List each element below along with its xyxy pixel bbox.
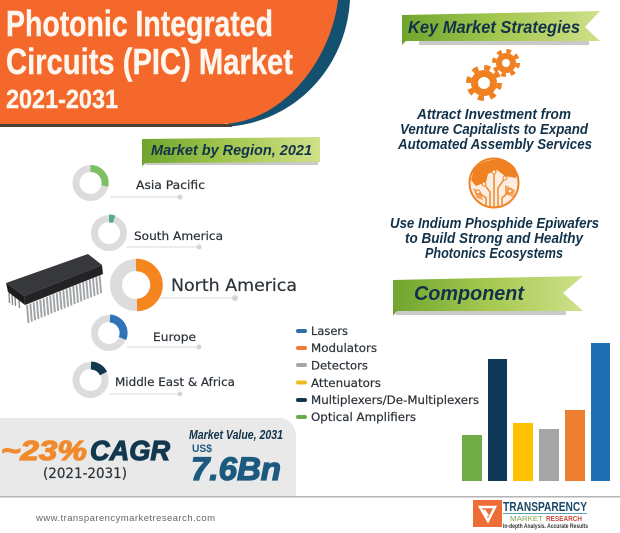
- bar chart: components: [462, 343, 610, 481]
- logo: TRANSPARENCY: [503, 500, 588, 514]
- donut: South America: South America: [134, 229, 223, 243]
- market value figure: US$: [192, 443, 212, 455]
- CAGR figure: [1, 435, 171, 482]
- donut: Middle East and Africa: [76, 366, 235, 396]
- donut: Asia Pacific: [76, 168, 205, 200]
- legend: components: [296, 324, 479, 424]
- title: Circuits (PIC) Market: [6, 41, 293, 82]
- legend: components: Lasers: [311, 324, 348, 338]
- donut: Middle East and Africa: Middle East & Africa: [115, 375, 235, 389]
- donut: Europe: Europe: [153, 330, 196, 344]
- header banner: [0, 0, 350, 127]
- donut: North America: [116, 265, 297, 305]
- strategy 2 text: Use Indium Phosphide Epiwafers: [390, 216, 599, 232]
- logo: MARKET: [510, 516, 544, 523]
- market value figure: [189, 428, 283, 487]
- strategy 2 text: Photonics Ecosystems: [425, 246, 563, 262]
- title: [6, 3, 293, 114]
- title: 2021-2031: [6, 84, 118, 114]
- title: Photonic Integrated: [6, 3, 273, 44]
- donut: North America: North America: [171, 276, 297, 296]
- icon: globe with circuit lines: [470, 158, 518, 208]
- legend: components: Multiplexers/De-Multiplexers: [311, 393, 479, 407]
- strategy 1 text: Attract Investment from: [416, 107, 571, 123]
- strategy 1 text: [397, 107, 592, 153]
- logo: RESEARCH: [546, 516, 582, 523]
- icon: gears: [468, 51, 518, 98]
- ribbon: component: [393, 276, 583, 316]
- ribbon: market by region: Market by Region, 2021: [151, 142, 312, 159]
- CAGR figure: ~23%: [1, 435, 87, 466]
- market value figure: 7.6Bn: [191, 451, 281, 487]
- logo: In-depth Analysis. Accurate Results: [503, 524, 589, 530]
- legend: components: Modulators: [311, 341, 377, 355]
- ribbon: key market strategies: Key Market Strategies: [408, 17, 580, 37]
- CAGR figure: CAGR: [90, 435, 171, 466]
- ribbon: component: Component: [414, 283, 525, 305]
- CAGR figure: (2021-2031): [43, 466, 127, 482]
- ribbon: market by region: [142, 137, 320, 166]
- ribbon: key market strategies: [402, 11, 600, 45]
- legend: components: Detectors: [311, 358, 368, 372]
- icon: integrated circuit chip: [6, 254, 103, 323]
- strategy 1 text: Automated Assembly Services: [397, 137, 592, 153]
- market value figure: Market Value, 2031: [189, 428, 283, 442]
- website url: www.transparencymarketresearch.com: [35, 513, 215, 524]
- panel: CAGR and market value: [0, 418, 296, 496]
- legend: components: Attenuators: [311, 376, 381, 390]
- strategy 2 text: [390, 216, 599, 262]
- logo: [473, 500, 589, 530]
- donut: Europe: [94, 318, 202, 350]
- footer rule: [0, 496, 620, 498]
- strategy 1 text: Venture Capitalists to Expand: [400, 122, 589, 138]
- strategy 2 text: to Build Strong and Healthy: [405, 231, 584, 247]
- donut: South America: [94, 218, 223, 250]
- legend: components: Optical Amplifiers: [311, 410, 416, 424]
- donut: Asia Pacific: Asia Pacific: [136, 178, 205, 192]
